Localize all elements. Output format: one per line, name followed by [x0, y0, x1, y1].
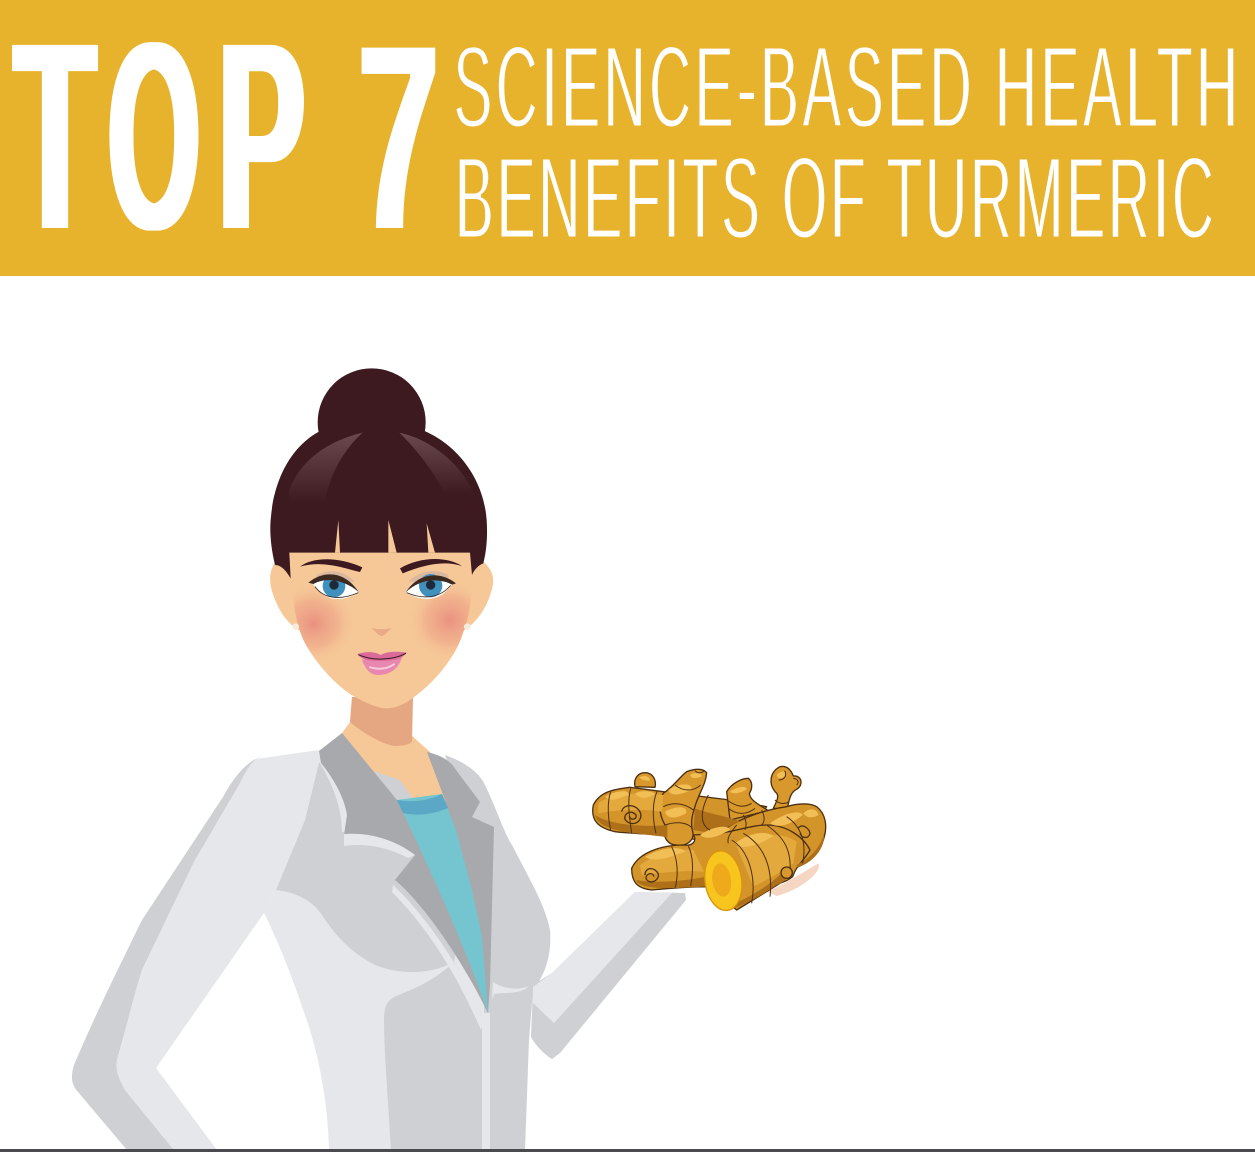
cheek blush: [294, 590, 471, 654]
title: TOP 7: [14, 0, 438, 288]
ears: [270, 557, 493, 632]
right pocket highlight: [492, 982, 529, 1000]
hair fringe slits: [335, 520, 435, 553]
doctor neck: [342, 697, 456, 815]
top knob: [635, 773, 655, 787]
eyebrows: [300, 559, 462, 573]
root ridge lines: [608, 771, 804, 903]
coat chest shading: [276, 760, 470, 972]
hair: [270, 425, 487, 578]
title: science-based health benefits of turmeric: BENEFITS OF TURMERIC: [455, 134, 1214, 263]
title: science-based health benefits of turmeric: [454, 23, 1238, 263]
coat right panel: [445, 755, 550, 1150]
right lapel: [427, 752, 494, 1013]
right back root: [723, 804, 826, 867]
left sleeve light: [116, 750, 321, 1150]
teal shirt: [397, 794, 488, 1013]
left sleeve shadow: [72, 756, 262, 1150]
turmeric root: [593, 766, 826, 913]
left lapel: [319, 733, 488, 1013]
front root: [632, 825, 810, 910]
back roots base: [593, 787, 767, 840]
left lapel edge highlight: [320, 756, 349, 832]
cut face of root: [701, 848, 746, 913]
doctor head: [270, 368, 493, 708]
lips: [357, 652, 407, 675]
coat lower centre panel: [384, 962, 482, 1150]
doctor white coat: [72, 733, 686, 1150]
vertical lump: [660, 769, 707, 845]
root highlights: [605, 771, 818, 860]
root mid tones: [598, 793, 797, 887]
hair highlights: [288, 433, 474, 503]
top right stem: [771, 766, 801, 809]
right sleeve: [531, 892, 686, 1059]
chest highlights: [344, 834, 484, 1030]
small top lump: [727, 778, 768, 820]
bottom rule: [0, 1149, 1255, 1152]
eyes: [308, 571, 456, 599]
hand shadow: [767, 863, 819, 896]
nose: [371, 628, 392, 636]
title banner: [0, 0, 1255, 288]
title: science-based health benefits of turmeric: SCIENCE-BASED HEALTH: [454, 23, 1238, 152]
hair bun: [318, 368, 426, 476]
coat front placket: [482, 1013, 490, 1150]
coat light body: [264, 860, 484, 1150]
shirt collar: [397, 794, 448, 815]
root shading: [595, 808, 824, 909]
illustration: doctor woman holding turmeric: [72, 368, 826, 1150]
pearl earrings: [292, 623, 471, 630]
root end rings: [622, 806, 810, 882]
face: [289, 550, 473, 708]
